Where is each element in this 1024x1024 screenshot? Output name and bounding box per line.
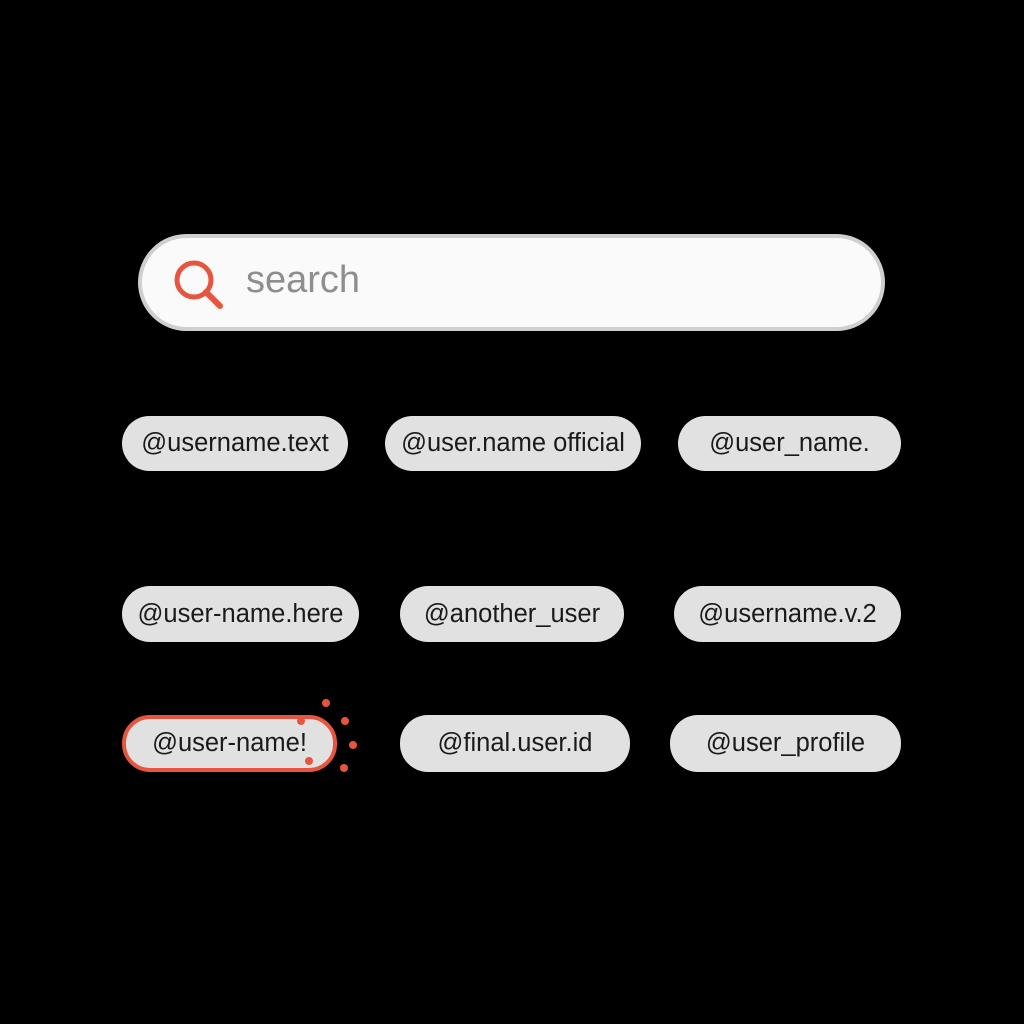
- pill 4: [122, 586, 359, 642]
- pill 8: [400, 715, 630, 772]
- pill 9: [670, 715, 901, 772]
- icon: magnifier: [174, 260, 223, 309]
- search bar: [138, 234, 885, 331]
- sparkle dots: [297, 699, 357, 772]
- pill 7 highlighted: @user-name!: [152, 729, 307, 757]
- pill 1: [122, 416, 348, 471]
- pill 9: @user_profile: [706, 729, 865, 757]
- pill 1: @username.text: [141, 429, 329, 457]
- pill 3: [678, 416, 901, 471]
- pill 5: [400, 586, 624, 642]
- pill 2: [385, 416, 641, 471]
- pill 7 highlighted: [122, 715, 337, 772]
- search placeholder: search: [246, 259, 360, 301]
- pill 4: @user-name.here: [138, 600, 343, 628]
- pill 2: @user.name official: [401, 429, 625, 457]
- pill 8: @final.user.id: [438, 729, 592, 757]
- pill 3: @user_name.: [709, 429, 870, 457]
- pill 6: [674, 586, 901, 642]
- pill 6: @username.v.2: [698, 600, 877, 628]
- pill 5: @another_user: [424, 600, 600, 628]
